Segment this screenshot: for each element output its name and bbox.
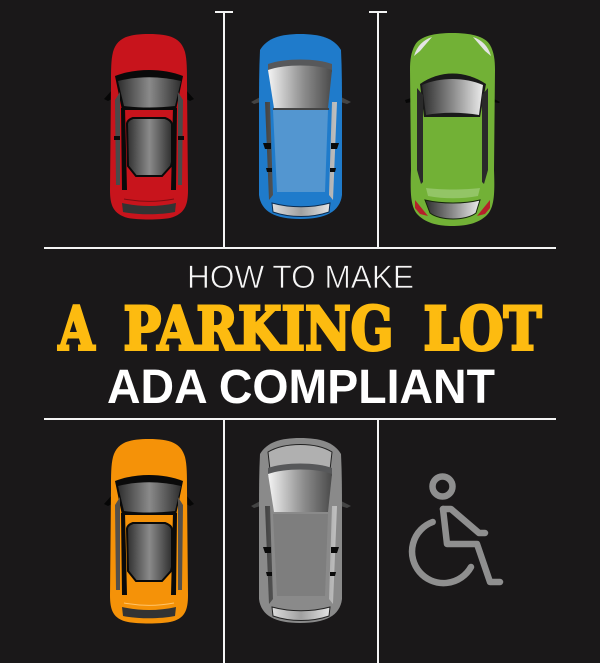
car: orange	[104, 439, 194, 624]
car: gray	[251, 438, 351, 623]
title line: how to make: HOW TO MAKE	[187, 259, 414, 295]
title line: ada compliant: ADA COMPLIANT	[107, 361, 495, 414]
title line: a parking lot: A	[58, 294, 96, 364]
title	[58, 259, 542, 414]
title line: a parking lot: PARKING	[124, 294, 394, 364]
icon: wheelchair accessibility symbol	[412, 476, 500, 583]
car: green	[405, 33, 500, 226]
car: blue	[251, 34, 351, 219]
title line: a parking lot	[58, 294, 542, 364]
title line: a parking lot: LOT	[424, 294, 542, 364]
car: red	[104, 34, 194, 220]
